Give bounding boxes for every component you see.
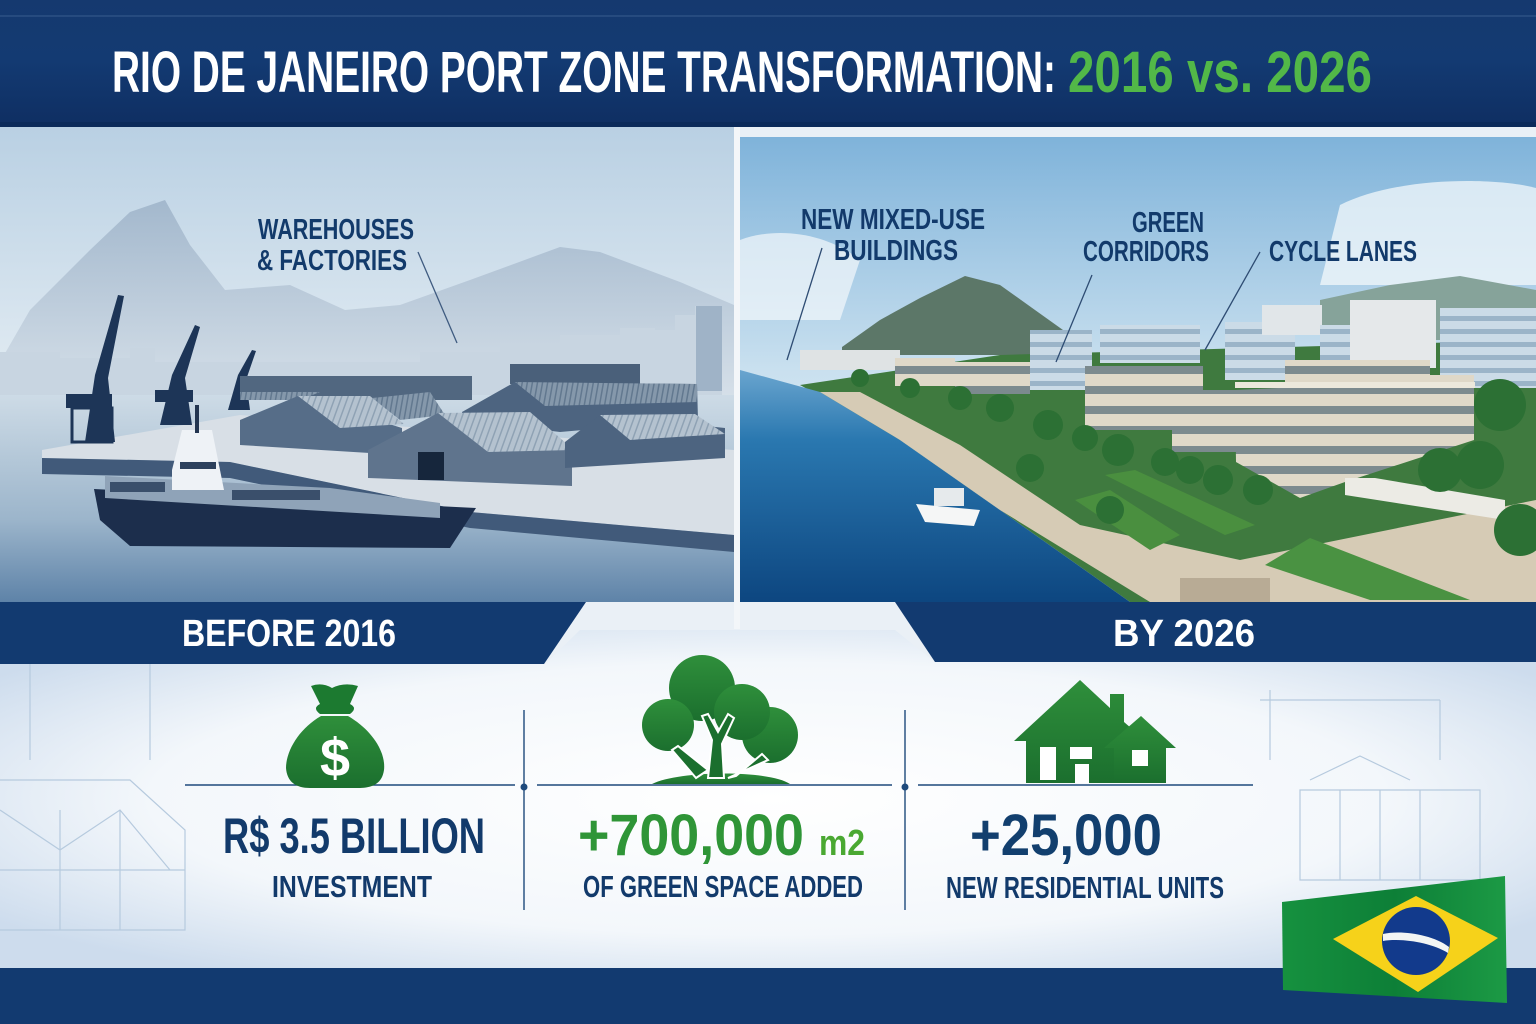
icon: money bag (286, 684, 384, 788)
banner: by 2026 (895, 602, 1536, 662)
divider between panels (734, 127, 740, 629)
footer band (0, 968, 1536, 1024)
panel: by 2026: CORRIDORS (1083, 236, 1209, 268)
ground (800, 340, 1536, 602)
promenade (820, 392, 1536, 602)
panel: before 2016 (0, 127, 734, 602)
icon: Brazilian flag (1282, 876, 1507, 1003)
water (740, 370, 1130, 602)
icon: trees (642, 655, 798, 784)
stat: investment: R$ 3.5 BILLION (223, 808, 485, 864)
labels: & FACTORIES (257, 245, 407, 277)
stat: green space: m2 (819, 822, 865, 863)
stat: residential units: +25,000 (970, 803, 1162, 868)
park beds (1075, 470, 1255, 550)
quay (42, 415, 734, 535)
title: 2016 vs. 2026 (1068, 40, 1372, 105)
banner: by 2026: BY 2026 (1113, 613, 1255, 655)
dividers (185, 710, 1253, 910)
stat: green space: +700,000 (578, 803, 804, 868)
stat: residential units: NEW RESIDENTIAL UNITS (946, 870, 1224, 905)
mountains (0, 200, 734, 400)
sea (0, 395, 734, 602)
labels: NEW MIXED-USE (801, 204, 985, 236)
labels: WAREHOUSES (258, 214, 414, 246)
labels (801, 204, 985, 267)
cranes (66, 295, 256, 442)
stat: residential units (946, 803, 1224, 905)
title: RIO DE JANEIRO PORT ZONE TRANSFORMATION: (112, 40, 1056, 105)
icon: houses (1014, 680, 1176, 783)
boat (916, 488, 980, 526)
labels: BUILDINGS (834, 235, 958, 267)
header band (0, 0, 1536, 127)
panel: statistics (0, 630, 1536, 968)
stat: investment: INVESTMENT (272, 869, 432, 904)
clouds (1320, 181, 1536, 285)
blueprint line art (0, 650, 1480, 930)
panel: by 2026: GREEN (1132, 207, 1204, 239)
hills (842, 276, 1070, 355)
stat: investment (223, 808, 485, 904)
labels (257, 214, 414, 277)
mixed-use buildings (800, 300, 1536, 520)
distant city (0, 306, 722, 395)
stat: green space (578, 803, 865, 904)
ship (94, 405, 476, 548)
warehouses (240, 364, 725, 486)
tree line (851, 369, 1536, 556)
icon: money bag: $ (320, 728, 350, 788)
banner: before 2016 (0, 602, 586, 664)
stat: green space: OF GREEN SPACE ADDED (583, 869, 863, 904)
panel: by 2026: CYCLE LANES (1269, 236, 1417, 268)
banner: before 2016: BEFORE 2016 (182, 613, 396, 655)
panel: by 2026 (740, 137, 1536, 602)
